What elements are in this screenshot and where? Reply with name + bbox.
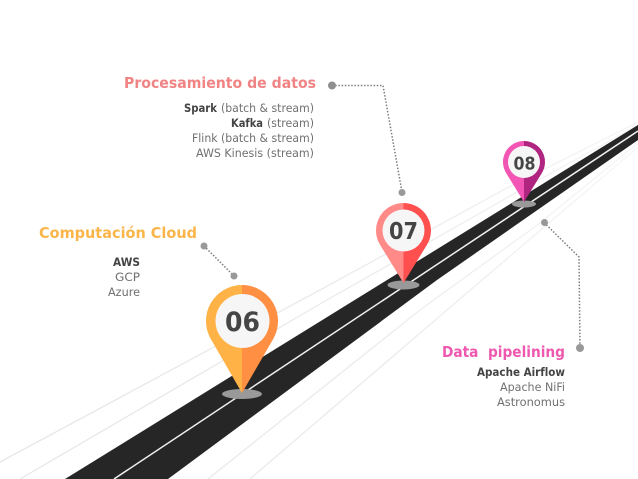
list: Data pipelining: Astronomus: [497, 395, 565, 409]
list: Data pipelining: Apache Airflow: [477, 365, 565, 379]
list: Computación Cloud: GCP: [115, 270, 140, 284]
pin 08: [503, 141, 545, 208]
list: Procesamiento de datos: [184, 101, 314, 160]
heading: Data pipelining: Data pipelining: [442, 343, 565, 361]
connector: Data pipelining to road: [541, 219, 584, 352]
list: Procesamiento de datos: (stream): [267, 116, 314, 130]
list: Procesamiento de datos: AWS Kinesis (stream): [196, 146, 314, 160]
list: Data pipelining: Apache NiFi: [500, 380, 565, 394]
pin 07: 07: [389, 219, 418, 245]
list: Procesamiento de datos: Flink (batch & stream): [192, 131, 314, 145]
pin 06: [206, 285, 278, 399]
list: Computación Cloud: AWS: [113, 255, 140, 269]
list: Computación Cloud: Azure: [108, 285, 140, 299]
list: Procesamiento de datos: Spark: [184, 101, 217, 115]
list: Procesamiento de datos: (batch & stream): [221, 101, 314, 115]
heading: Procesamiento de datos: Procesamiento de datos: [124, 74, 316, 92]
list: Procesamiento de datos: Kafka: [231, 116, 263, 130]
list: Data pipelining: [477, 365, 565, 409]
connector: Computación Cloud to pin 06: [200, 242, 238, 280]
list: Computación Cloud: [108, 255, 140, 299]
pin 06: 06: [225, 307, 260, 338]
road: [65, 125, 638, 479]
connector: Procesamiento de datos to pin 07: [328, 82, 406, 196]
pin 07: [376, 203, 431, 290]
heading: Computación Cloud: Computación Cloud: [39, 224, 197, 242]
pin 08: 08: [514, 154, 536, 174]
